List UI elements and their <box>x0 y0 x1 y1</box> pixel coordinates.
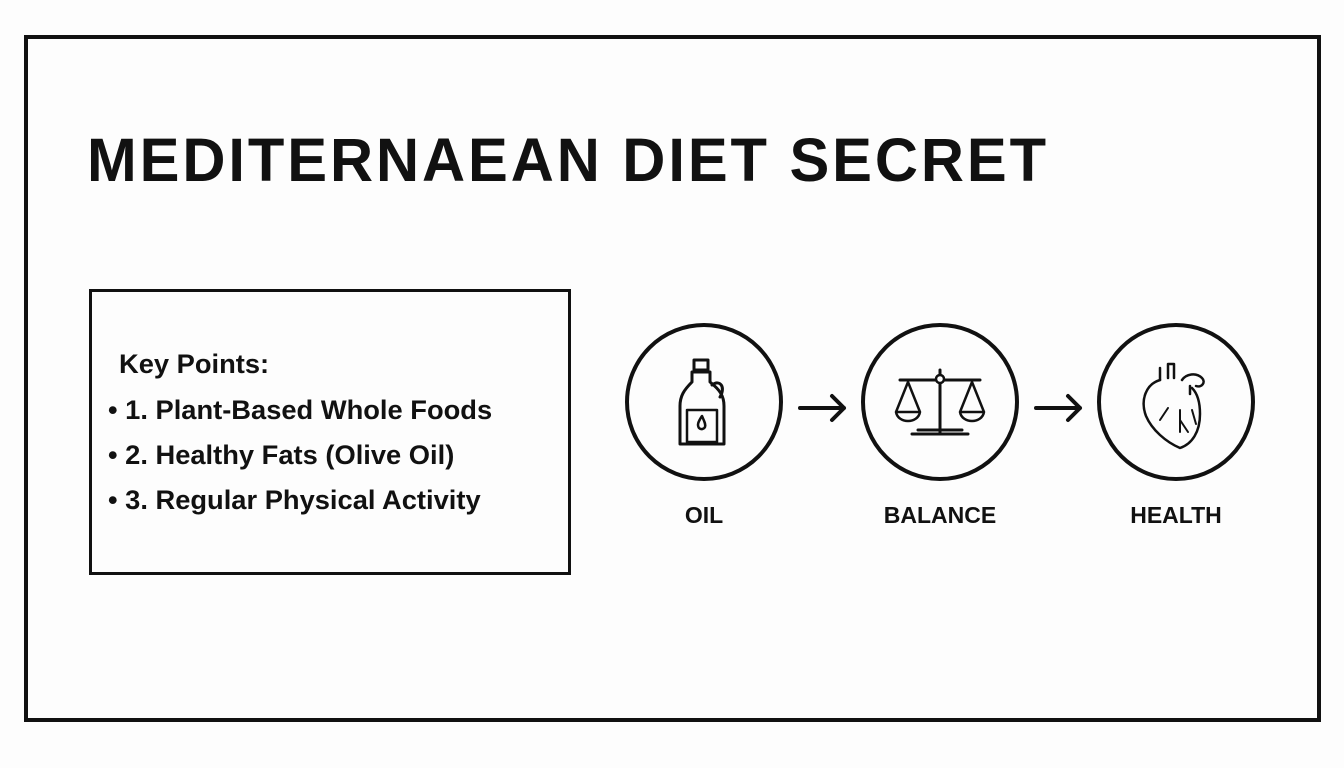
arrow 1 <box>800 396 844 420</box>
title: MEDITERNAEAN DIET SECRET <box>87 126 1049 194</box>
bullet 1: • 1. Plant-Based Whole Foods <box>108 395 492 425</box>
arrow 2 <box>1036 396 1080 420</box>
label: health: HEALTH <box>1130 502 1222 528</box>
label: oil: OIL <box>685 502 723 528</box>
heading: key points: Key Points: <box>119 349 269 379</box>
icon: oil bottle <box>627 325 781 479</box>
bullet 2: • 2. Healthy Fats (Olive Oil) <box>108 440 454 470</box>
bullet 3: • 3. Regular Physical Activity <box>108 485 481 515</box>
panel: key points <box>89 289 571 575</box>
icon: balance scale <box>863 325 1017 479</box>
label: balance: BALANCE <box>884 502 996 528</box>
icon: heart <box>1099 325 1253 479</box>
